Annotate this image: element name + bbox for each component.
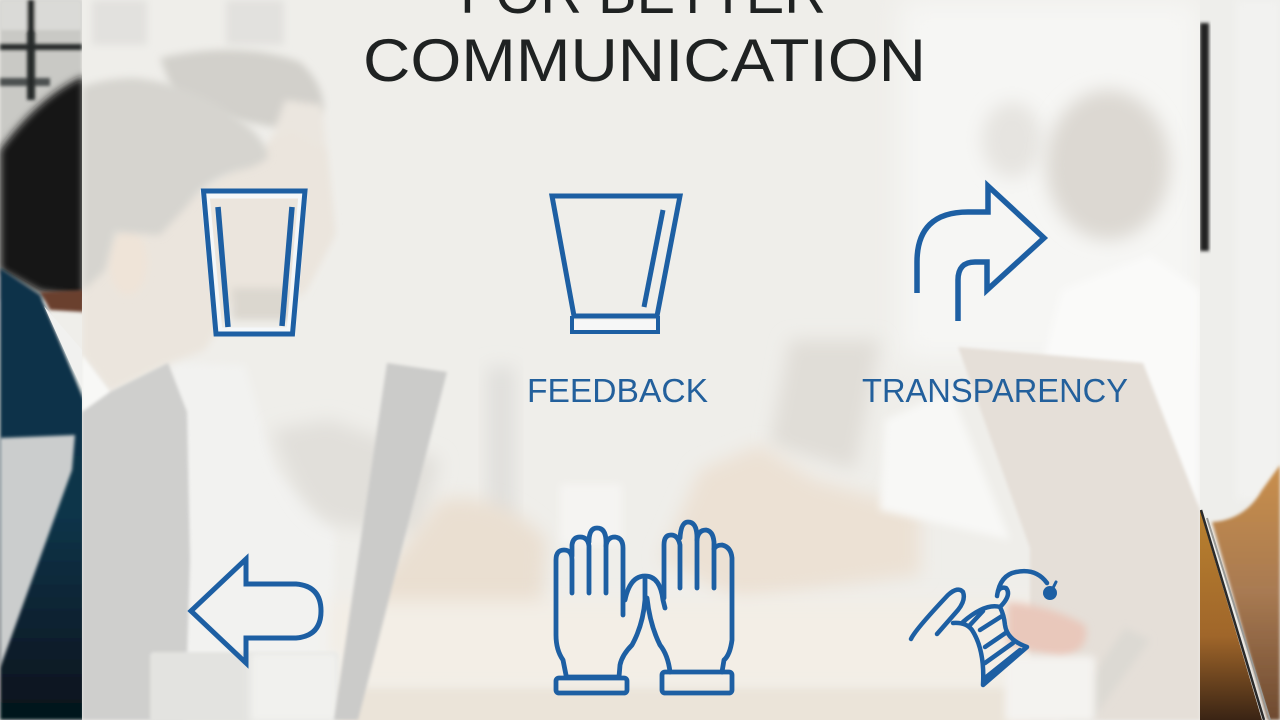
icon: gesture hand: [911, 571, 1057, 685]
icon: left arrow: [191, 559, 321, 663]
left photo strip: [0, 0, 84, 720]
near left laptop: [0, 435, 75, 668]
right laptop: [958, 347, 1200, 720]
shirt collar: [82, 358, 108, 409]
far colleague shirt: [170, 363, 335, 720]
right hand: [664, 535, 680, 598]
dark wall frame: [1200, 23, 1209, 251]
dark sweater: [82, 363, 190, 720]
icon: feedback glass: [552, 196, 680, 332]
sleeve: [1212, 465, 1280, 720]
main man's ear: [109, 229, 147, 295]
hair: [0, 76, 84, 298]
right colleague heads: [982, 102, 1042, 178]
mouth smudge: [232, 288, 292, 320]
white cup right: [1005, 656, 1095, 720]
left hand: [556, 550, 572, 675]
title: [363, 0, 926, 94]
navy suit: [0, 268, 84, 720]
main man's hair: [82, 78, 268, 292]
label: feedback: FEEDBACK: [527, 372, 708, 409]
laptop stand: [1100, 636, 1141, 700]
main man's face: [84, 166, 290, 388]
far colleague head: [160, 50, 323, 130]
center objects: [488, 370, 514, 506]
laptop base: [1200, 510, 1262, 720]
cup: [150, 652, 252, 720]
pink hand: [1007, 602, 1086, 658]
right photo strip: [1200, 0, 1280, 720]
dark laptop screen: [334, 363, 447, 720]
icon: tall glass: [204, 191, 305, 334]
icon: transparency arrow: [917, 186, 1044, 321]
left cuff: [556, 678, 627, 693]
right cuff: [662, 672, 732, 693]
right colleague shirt: [1072, 294, 1200, 501]
icon: raised hands: [556, 522, 732, 693]
window bands: [92, 0, 284, 45]
title: COMMUNICATION: [363, 27, 926, 94]
table: [382, 598, 542, 664]
label: transparency: TRANSPARENCY: [862, 372, 1128, 409]
